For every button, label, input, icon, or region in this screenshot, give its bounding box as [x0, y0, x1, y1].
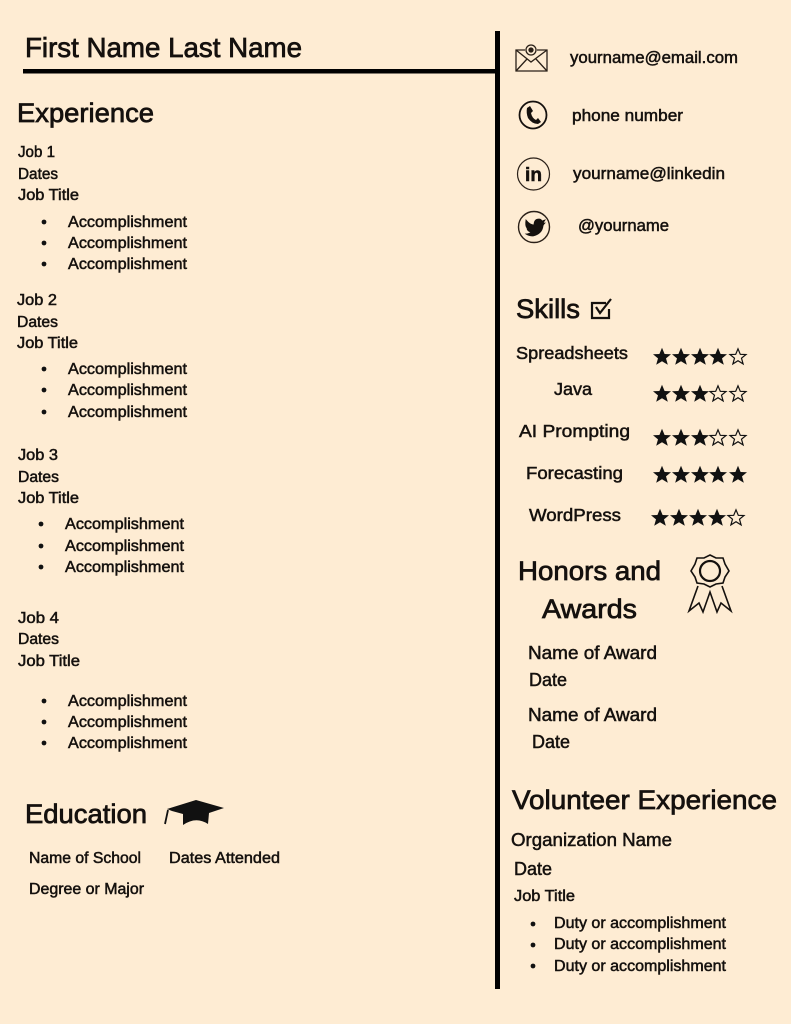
panel: skills	[516, 294, 747, 526]
award 2	[528, 705, 657, 752]
skill: forecasting	[526, 463, 747, 483]
job 2: Dates	[17, 314, 58, 331]
job 4: Job 4	[18, 610, 59, 627]
job 3: Job Title	[18, 490, 79, 507]
job 1: Accomplishment	[68, 235, 188, 252]
honors heading: Awards	[542, 594, 637, 624]
job 3: Accomplishment	[65, 559, 185, 576]
award 1: Name of Award	[528, 643, 657, 663]
skill: java	[554, 379, 746, 402]
volunteer duties	[531, 915, 727, 975]
twitter handle: @yourname	[578, 217, 669, 235]
column divider	[495, 31, 500, 989]
job 2	[17, 292, 188, 421]
panel: volunteer experience	[511, 785, 777, 975]
job 4: Accomplishment	[68, 714, 188, 731]
school details: Degree or Major	[29, 881, 144, 898]
job 1: Accomplishment	[68, 256, 188, 273]
job 2: Accomplishment	[68, 404, 188, 421]
job 2: Accomplishment	[68, 361, 188, 378]
job 2: Job 2	[17, 292, 57, 309]
job 3	[18, 447, 185, 576]
skills heading: Skills	[516, 294, 580, 324]
skill: spreadsheets: Spreadsheets	[516, 343, 628, 363]
job 4: Dates	[18, 631, 59, 648]
school details: Dates Attended	[169, 850, 280, 867]
icon: graduation cap	[165, 800, 224, 825]
skill: spreadsheets	[516, 343, 746, 365]
job 2: Accomplishment	[68, 382, 188, 399]
experience heading: Experience	[17, 98, 154, 128]
award 1	[528, 643, 657, 690]
award 2: Name of Award	[528, 705, 657, 725]
volunteer job title: Job Title	[514, 888, 575, 905]
volunteer duties: Duty or accomplishment	[554, 958, 727, 975]
job 1: Job Title	[18, 187, 79, 204]
award 2: Date	[532, 732, 570, 752]
job 2: Job Title	[17, 335, 78, 352]
phone: phone number	[572, 107, 684, 125]
volunteer heading: Volunteer Experience	[512, 785, 777, 815]
icon: linkedin: in	[525, 165, 542, 186]
volunteer duties: Duty or accomplishment	[554, 915, 727, 932]
icon: phone	[520, 102, 546, 128]
job 3: Accomplishment	[65, 538, 185, 555]
honors heading: Honors and	[518, 556, 661, 586]
name title: First Name Last Name	[25, 32, 302, 63]
skill: forecasting: Forecasting	[526, 463, 623, 483]
panel: education	[25, 799, 280, 898]
award 1: Date	[529, 670, 567, 690]
job 3: Accomplishment	[65, 516, 185, 533]
linkedin: yourname@linkedin	[573, 165, 725, 183]
panel: experience	[17, 98, 188, 752]
icon: twitter	[518, 212, 550, 242]
school details	[29, 850, 280, 898]
icon: award ribbon	[689, 555, 731, 612]
skill: wordpress	[529, 505, 744, 526]
education heading: Education	[25, 799, 147, 829]
email: yourname@email.com	[570, 49, 738, 67]
volunteer date: Date	[514, 859, 552, 879]
school details: Name of School	[29, 850, 141, 867]
job 3: Job 3	[18, 447, 58, 464]
job 1	[18, 144, 188, 273]
icon: checkbox	[592, 299, 611, 318]
job 1: Dates	[18, 166, 58, 183]
skill: java: Java	[554, 379, 592, 399]
header rule	[23, 69, 497, 74]
skill: wordpress: WordPress	[529, 505, 621, 525]
job 4: Accomplishment	[68, 693, 188, 710]
job 4: Accomplishment	[68, 735, 188, 752]
job 4: Job Title	[18, 653, 80, 670]
honors heading	[518, 556, 661, 624]
icon: envelope	[516, 45, 547, 71]
job 1: Job 1	[18, 144, 55, 161]
skill: ai prompting: AI Prompting	[519, 421, 630, 441]
panel: contact	[516, 45, 738, 242]
job 1: Accomplishment	[68, 214, 188, 231]
job 3: Dates	[18, 469, 59, 486]
skill: ai prompting	[519, 421, 746, 446]
organization name: Organization Name	[511, 830, 672, 850]
job 4	[18, 610, 188, 752]
icon: linkedin	[518, 158, 550, 190]
panel: honors and awards	[518, 555, 731, 752]
volunteer duties: Duty or accomplishment	[554, 936, 727, 953]
